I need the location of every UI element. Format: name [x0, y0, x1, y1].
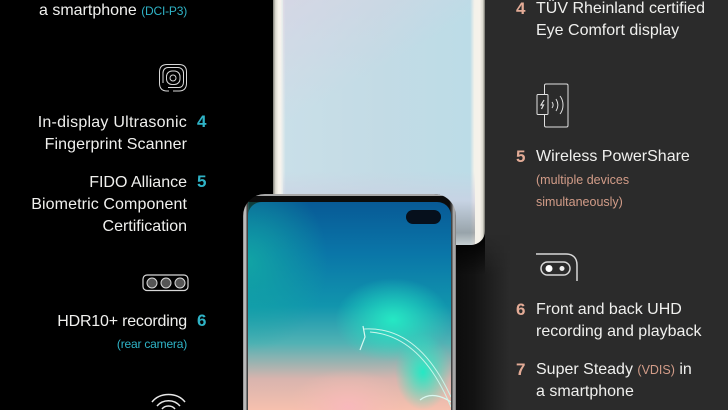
text: a smartphone DCI-P3: a smartphone (DCI-P3) — [39, 2, 187, 19]
front phone — [243, 194, 456, 410]
icon: front dual camera — [536, 253, 578, 281]
number 7: 7 — [516, 360, 525, 379]
number 6: 6 — [516, 300, 525, 319]
text: wireless powershare: Wireless PowerShare — [536, 148, 690, 165]
phone screen wallpaper — [248, 202, 451, 410]
number 4: 4 — [197, 112, 206, 131]
text: certification: Certification — [103, 218, 187, 235]
text: multiple devices: (multiple devices — [536, 173, 629, 187]
icon: wireless signal — [152, 394, 186, 410]
text: rear camera: (rear camera) — [117, 337, 187, 351]
screen wave highlight — [364, 329, 451, 407]
icon: triple camera — [142, 274, 189, 292]
text: HDR10+ recording: HDR10+ recording — [57, 313, 187, 330]
back phone glass tint — [283, 0, 475, 245]
text: biometric component: Biometric Component — [31, 196, 187, 213]
number 5: 5 — [516, 147, 525, 166]
text: recording and playback: recording and playback — [536, 323, 701, 340]
panel: right dark background — [485, 0, 728, 410]
phone top frame — [243, 194, 456, 196]
icon: wireless powershare — [536, 84, 568, 128]
text: super steady: Super Steady (VDIS) in — [536, 361, 692, 378]
number 6: 6 — [197, 311, 206, 330]
text: simultaneously: simultaneously) — [536, 195, 623, 209]
text: TUV Rheinland: TÜV Rheinland certified — [536, 0, 705, 17]
text: a smartphone: a smartphone — [536, 383, 634, 400]
phone shadow on right panel — [456, 248, 496, 410]
icon: fingerprint — [159, 64, 187, 92]
text: FIDO Alliance: FIDO Alliance — [89, 174, 187, 191]
number 5: 5 — [197, 172, 206, 191]
text: eye comfort display: Eye Comfort display — [536, 22, 679, 39]
punch-hole camera — [406, 210, 441, 224]
text: fingerprint scanner: Fingerprint Scanner — [45, 136, 187, 153]
text: front and back UHD: Front and back UHD — [536, 301, 682, 318]
text: in-display ultrasonic: In-display Ultrasonic — [38, 114, 187, 131]
right column: features 4 to 7 — [516, 0, 705, 400]
left column: features 3 to 7 — [31, 2, 206, 410]
back phone — [273, 0, 485, 245]
